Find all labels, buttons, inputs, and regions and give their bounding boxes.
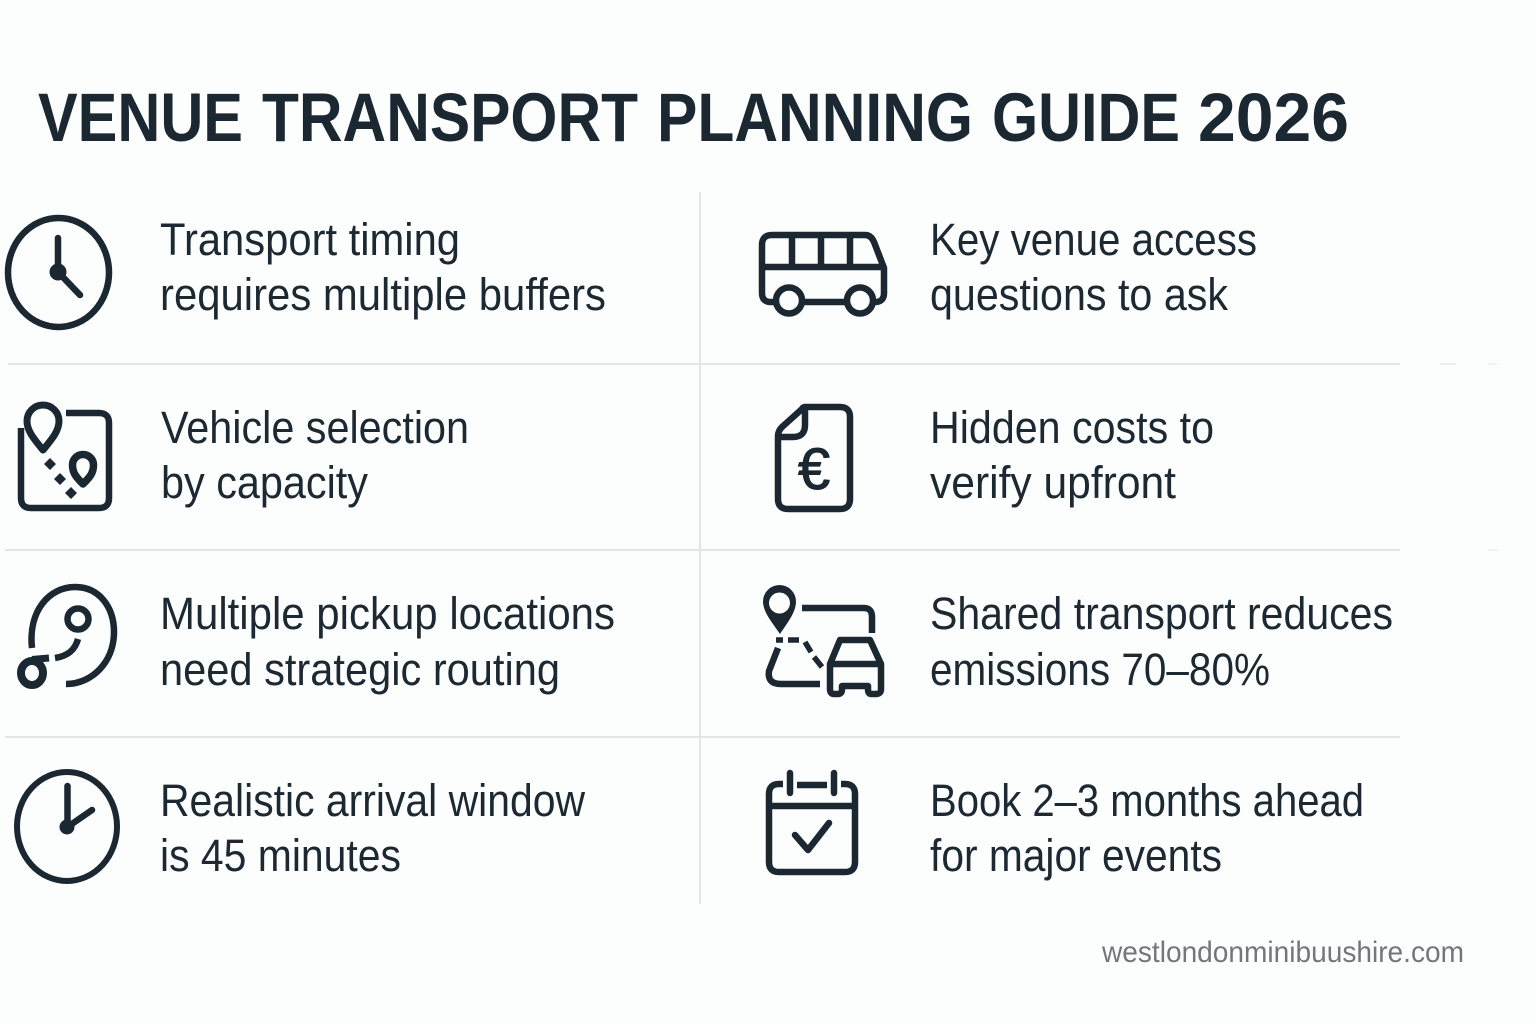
- footer url: westlondonminibuushire.com: [1101, 936, 1464, 969]
- icon: map with pins: [21, 405, 109, 508]
- text: vehicle selection: Vehicle selection: [161, 402, 469, 453]
- text: vehicle selection: by capacity: [161, 457, 368, 508]
- panel: vehicle selection: [21, 402, 469, 508]
- text: arrival window: Realistic arrival window: [160, 775, 585, 826]
- title: GUIDE: [992, 79, 1180, 156]
- text: arrival window: is 45 minutes: [160, 830, 401, 881]
- title: 2026: [1198, 79, 1349, 156]
- text: hidden costs: Hidden costs to: [930, 402, 1214, 453]
- text: venue access: questions to ask: [930, 269, 1228, 320]
- text: shared transport: emissions 70–80%: [930, 644, 1270, 695]
- icon: route loop: [21, 587, 114, 685]
- panel: transport timing: [8, 214, 606, 327]
- title: PLANNING: [657, 79, 973, 156]
- text: booking: Book 2–3 months ahead: [930, 775, 1364, 826]
- text: pickup locations: Multiple pickup locations: [160, 588, 615, 639]
- icon: bus: [762, 235, 884, 314]
- icon: clock: [8, 218, 109, 327]
- panel: booking: [769, 773, 1364, 881]
- text: hidden costs: verify upfront: [930, 457, 1176, 508]
- icon: euro document: [778, 407, 850, 509]
- panel: shared transport: [763, 585, 1393, 695]
- text: transport timing: requires multiple buffers: [160, 269, 606, 320]
- text: shared transport: Shared transport reduces: [930, 588, 1393, 639]
- panel: hidden costs: [778, 402, 1214, 509]
- text: pickup locations: need strategic routing: [160, 644, 560, 695]
- text: booking: for major events: [930, 830, 1222, 881]
- icon: calendar with check: [769, 773, 855, 872]
- text: venue access: Key venue access: [930, 214, 1257, 265]
- title: TRANSPORT: [262, 79, 638, 156]
- title: VENUE: [38, 79, 243, 156]
- text: transport timing: Transport timing: [160, 214, 460, 265]
- panel: arrival window: [17, 772, 585, 881]
- icon: euro document: €: [798, 437, 830, 502]
- icon: route and car: [763, 585, 881, 694]
- panel: venue access: [762, 214, 1257, 320]
- icon: clock: [17, 772, 117, 881]
- panel: pickup locations: [21, 587, 615, 695]
